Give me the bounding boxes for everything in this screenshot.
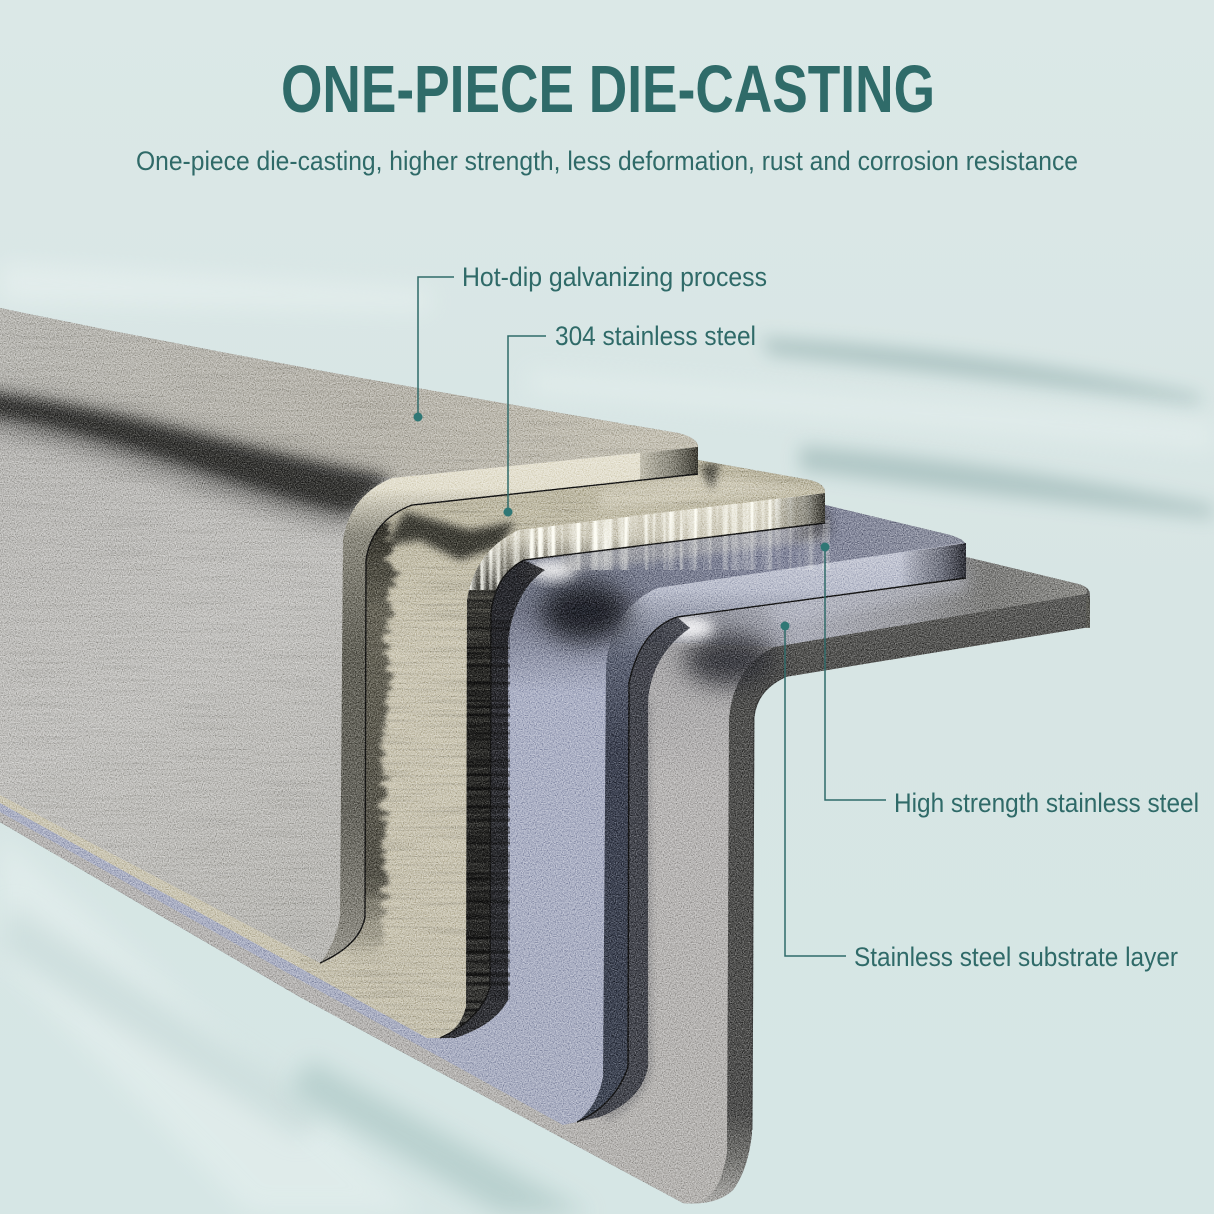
callout: hot-dip galvanizing process: Hot-dip galvanizing process xyxy=(462,262,767,292)
callout: high strength stainless steel xyxy=(820,542,1199,818)
layer: stainless steel substrate xyxy=(0,557,1090,1204)
title: ONE-PIECE DIE-CASTING xyxy=(281,52,935,127)
callout: stainless steel substrate layer: Stainless steel substrate layer xyxy=(854,942,1178,972)
layer: high strength stainless steel xyxy=(0,480,966,1125)
black layer seams xyxy=(320,474,966,1130)
subtitle: One-piece die-casting, higher strength, less deformation, rust and corrosion resistance xyxy=(136,146,1078,176)
layer: hot-dip galvanizing xyxy=(0,300,700,970)
callout: 304 stainless steel: 304 stainless steel xyxy=(555,321,756,351)
callout: stainless steel substrate layer xyxy=(780,622,1178,972)
layer: 304 stainless steel xyxy=(0,440,830,1050)
metal angle bar, layered cross-section xyxy=(0,300,1090,1204)
callout: hot-dip galvanizing process xyxy=(414,262,767,422)
callout: 304 stainless steel xyxy=(504,321,756,516)
